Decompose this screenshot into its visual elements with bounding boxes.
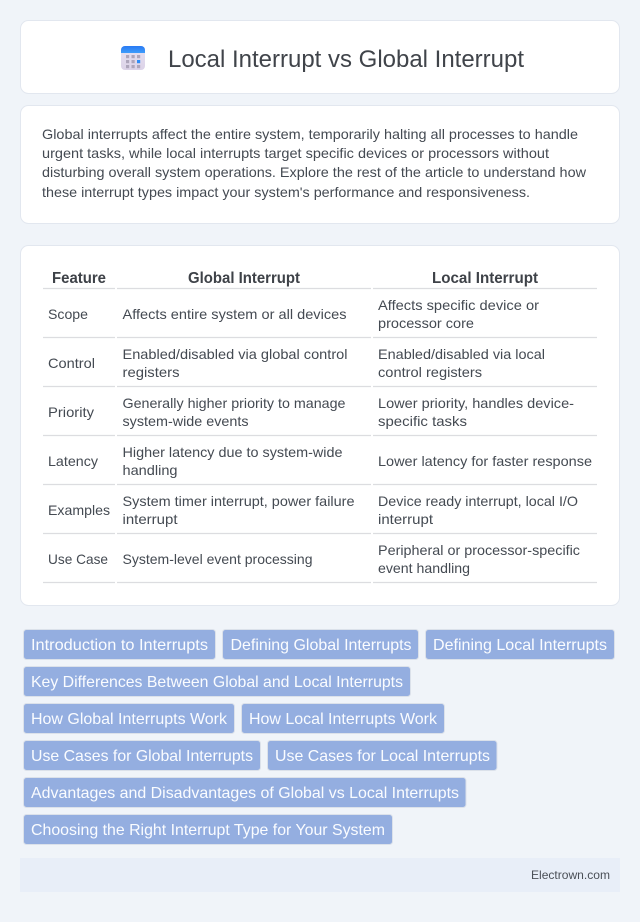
tag (24, 778, 466, 808)
tag: Defining Local Interrupts (433, 637, 607, 654)
tag (426, 630, 614, 660)
row: use case (48, 542, 580, 576)
tag: How Local Interrupts Work (249, 711, 438, 728)
tag (268, 740, 497, 770)
panel: intro (20, 106, 620, 224)
row: examples: Examples (48, 502, 110, 518)
row: priority: specific tasks (378, 413, 467, 429)
row: latency: handling (122, 462, 178, 478)
table header (52, 270, 539, 287)
row: use case: event handling (378, 560, 470, 576)
row: control: Enabled/disabled via global control (122, 346, 348, 362)
row: control: control registers (378, 364, 482, 380)
tag: Advantages and Disadvantages of Global vs Local Interrupts (31, 785, 459, 802)
row: control (48, 346, 545, 380)
tag: Key Differences Between Global and Local Interrupts (31, 674, 403, 691)
tag (242, 704, 444, 734)
row: scope: Scope (48, 306, 88, 322)
topic tags (24, 630, 614, 844)
row: priority: system-wide events (122, 413, 248, 429)
row: scope: Affects specific device or (378, 297, 539, 313)
row: scope (48, 297, 539, 331)
table header: Feature (52, 270, 106, 287)
row: priority: Lower priority, handles device- (378, 395, 574, 411)
row: latency (48, 444, 592, 478)
row: latency: Lower latency for faster response (378, 453, 592, 469)
row: control: Control (48, 355, 95, 371)
row: control: Enabled/disabled via local (378, 346, 545, 362)
row: examples: interrupt (378, 511, 433, 527)
row: priority (48, 395, 574, 429)
tag (24, 740, 260, 770)
intro text: disturbing overall system operations. Explore the rest of the article to understand how (42, 164, 587, 180)
row: examples: System timer interrupt, power failure (122, 493, 355, 509)
intro text: urgent tasks, while local interrupts target specific devices or processors without (42, 145, 549, 161)
row: priority: Generally higher priority to manage (122, 395, 346, 411)
row: scope: Affects entire system or all devices (122, 306, 346, 322)
tag: Choosing the Right Interrupt Type for Your System (31, 822, 385, 839)
tag (24, 814, 392, 844)
panel: header (20, 20, 620, 94)
row: scope: processor core (378, 315, 474, 331)
tag: Use Cases for Global Interrupts (31, 748, 253, 765)
row: use case: Use Case (48, 551, 108, 567)
intro text: these interrupt types impact your system's performance and responsiveness. (42, 184, 530, 200)
row: priority: Priority (48, 404, 94, 420)
tag: Introduction to Interrupts (31, 637, 208, 654)
tag (24, 666, 410, 696)
row: use case: System-level event processing (122, 551, 312, 567)
row: examples: Device ready interrupt, local I/O (378, 493, 578, 509)
title: Local Interrupt vs Global Interrupt (168, 46, 524, 73)
row: use case: Peripheral or processor-specific (378, 542, 580, 558)
row: examples (48, 493, 578, 527)
intro text (42, 126, 587, 200)
tag (222, 630, 418, 660)
intro text: Global interrupts affect the entire system, temporarily halting all processes to handle (42, 126, 578, 142)
row: latency: Higher latency due to system-wide (122, 444, 343, 460)
footer (20, 858, 620, 892)
tag: How Global Interrupts Work (31, 711, 228, 728)
icon: calendar (121, 46, 145, 70)
tag (24, 630, 216, 660)
panel: comparison table (20, 246, 620, 606)
tag: Use Cases for Local Interrupts (275, 748, 490, 765)
table header: Global Interrupt (188, 270, 301, 287)
row: latency: Latency (48, 453, 98, 469)
row: examples: interrupt (122, 511, 178, 527)
tag: Defining Global Interrupts (230, 637, 412, 654)
footer: Electrown.com (531, 868, 610, 882)
tag (24, 704, 234, 734)
table header: Local Interrupt (432, 270, 539, 287)
row: control: registers (122, 364, 180, 380)
